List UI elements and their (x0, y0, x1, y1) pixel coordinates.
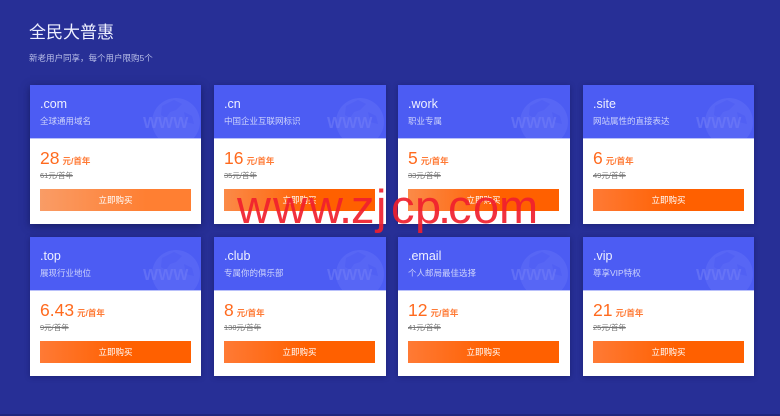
panel: .com (30, 85, 201, 224)
card header: .vip: .vip (593, 249, 612, 263)
button: .vip: 立即购买 (651, 347, 686, 357)
card header: .vip: WWW (696, 267, 742, 284)
old price: .vip: 25元/首年 (593, 323, 626, 332)
button: .com (40, 189, 191, 211)
button: .site: 立即购买 (651, 195, 686, 205)
card header: .work (398, 85, 570, 139)
bottom edge (0, 414, 780, 416)
card header: .cn: WWW (327, 115, 373, 132)
card header: .top: WWW (143, 267, 189, 284)
old price: .work: 33元/首年 (408, 171, 441, 180)
card header: .com (30, 85, 201, 139)
panel: .top (30, 237, 201, 376)
watermark: www.zjcp.com (236, 180, 538, 233)
price: .cn: 16 元/首年 (224, 148, 274, 168)
card header: .cn (214, 85, 386, 139)
card header: .site: 网站属性的直接表达 (593, 116, 670, 126)
card header: .work: .work (408, 97, 438, 111)
panel: .work (398, 85, 570, 224)
card header: .work: 职业专属 (408, 116, 442, 126)
card header: .club (214, 237, 386, 291)
card header: .club: .club (224, 249, 250, 263)
panel: .email (398, 237, 570, 376)
button: .site (593, 189, 744, 211)
card header: .vip: 尊享VIP特权 (593, 268, 641, 278)
button: .club: 立即购买 (282, 347, 316, 357)
card header: .com: .com (40, 97, 67, 111)
panel: .site (583, 85, 754, 224)
card header: .com: 全球通用域名 (40, 116, 91, 126)
price: .vip: 21 元/首年 (593, 300, 643, 320)
button: .vip (593, 341, 744, 363)
card header: .email: WWW (511, 267, 557, 284)
panel: .club (214, 237, 386, 376)
title: 全民大普惠 (29, 23, 114, 42)
card header: .site: .site (593, 97, 616, 111)
subtitle: 新老用户同享，每个用户限购5个 (29, 53, 153, 63)
card header: .vip (583, 237, 754, 291)
card header: .club: WWW (327, 267, 373, 284)
card header: .email: 个人邮局最佳选择 (408, 268, 476, 278)
card header: .email (398, 237, 570, 291)
button: .email (408, 341, 559, 363)
price: .top: 6.43 元/首年 (40, 300, 105, 320)
price: .com: 28 元/首年 (40, 148, 90, 168)
card header: .email: .email (408, 249, 441, 263)
card header: .club: 专属你的俱乐部 (224, 268, 284, 278)
card header: .site (583, 85, 754, 139)
old price: .site: 49元/首年 (593, 171, 626, 180)
card header: .top: .top (40, 249, 61, 263)
button: .cn (224, 189, 375, 211)
button: .email: 立即购买 (466, 347, 500, 357)
old price: .cn: 35元/首年 (224, 171, 257, 180)
card header: .cn: 中国企业互联网标识 (224, 116, 301, 126)
old price: .com: 61元/首年 (40, 171, 73, 180)
card header: .top (30, 237, 201, 291)
price: .email: 12 元/首年 (408, 300, 458, 320)
price: .club: 8 元/首年 (224, 300, 265, 320)
button: .com: 立即购买 (98, 195, 132, 205)
card header: .work: WWW (511, 115, 557, 132)
card header: .cn: .cn (224, 97, 241, 111)
card header: .top: 展现行业地位 (40, 268, 91, 278)
old price: .club: 138元/首年 (224, 323, 261, 332)
old price: .email: 41元/首年 (408, 323, 441, 332)
button: .club (224, 341, 375, 363)
panel: .cn (214, 85, 386, 224)
button: .top: 立即购买 (98, 347, 132, 357)
card header: .com: WWW (143, 115, 189, 132)
button: .work: 立即购买 (466, 195, 500, 205)
button: .work (408, 189, 559, 211)
old price: .top: 9元/首年 (40, 323, 69, 332)
card header: .site: WWW (696, 115, 742, 132)
panel: .vip (583, 237, 754, 376)
button: .cn: 立即购买 (282, 195, 316, 205)
price: .work: 5 元/首年 (408, 148, 449, 168)
button: .top (40, 341, 191, 363)
price: .site: 6 元/首年 (593, 148, 634, 168)
